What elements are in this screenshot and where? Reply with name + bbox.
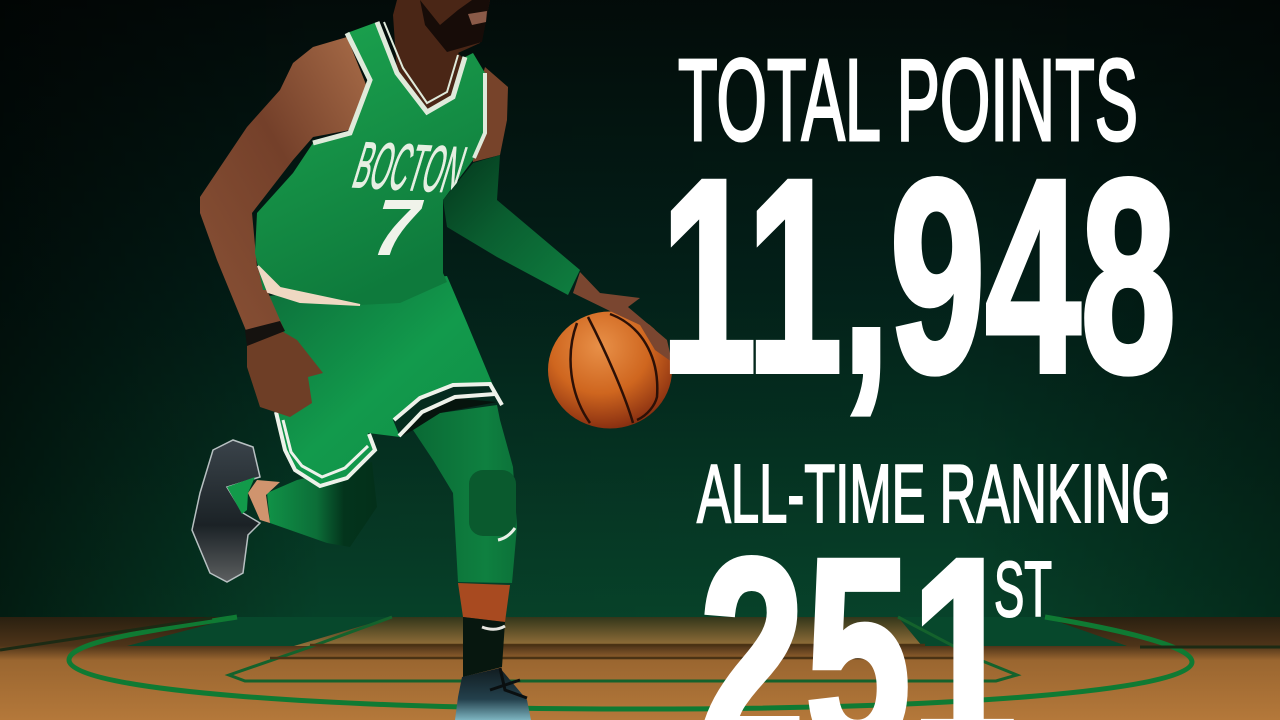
left hand: [247, 330, 323, 417]
player: [192, 0, 672, 720]
lips: [468, 11, 487, 25]
jersey number: 7: [361, 183, 433, 273]
jersey: [255, 22, 485, 305]
right hand on ball: [573, 272, 672, 362]
right sleeve: [443, 155, 580, 295]
wristband: [245, 321, 285, 346]
left arm: [200, 37, 367, 333]
rear shoe: [192, 440, 260, 582]
front shoe: [455, 668, 531, 720]
right upper arm: [470, 67, 508, 162]
basketball: [548, 312, 672, 428]
face shading and beard: [420, 0, 490, 52]
basketball court floor: [0, 617, 1280, 720]
ordinal suffix: st: ST: [994, 545, 1052, 633]
rear ankle: [248, 480, 280, 523]
neck and chest: [393, 0, 490, 112]
front leg: [413, 405, 517, 677]
rear thigh: [267, 462, 377, 547]
player: BOCTON: [346, 129, 474, 207]
shorts: [268, 276, 502, 488]
rear sock: [227, 477, 255, 514]
